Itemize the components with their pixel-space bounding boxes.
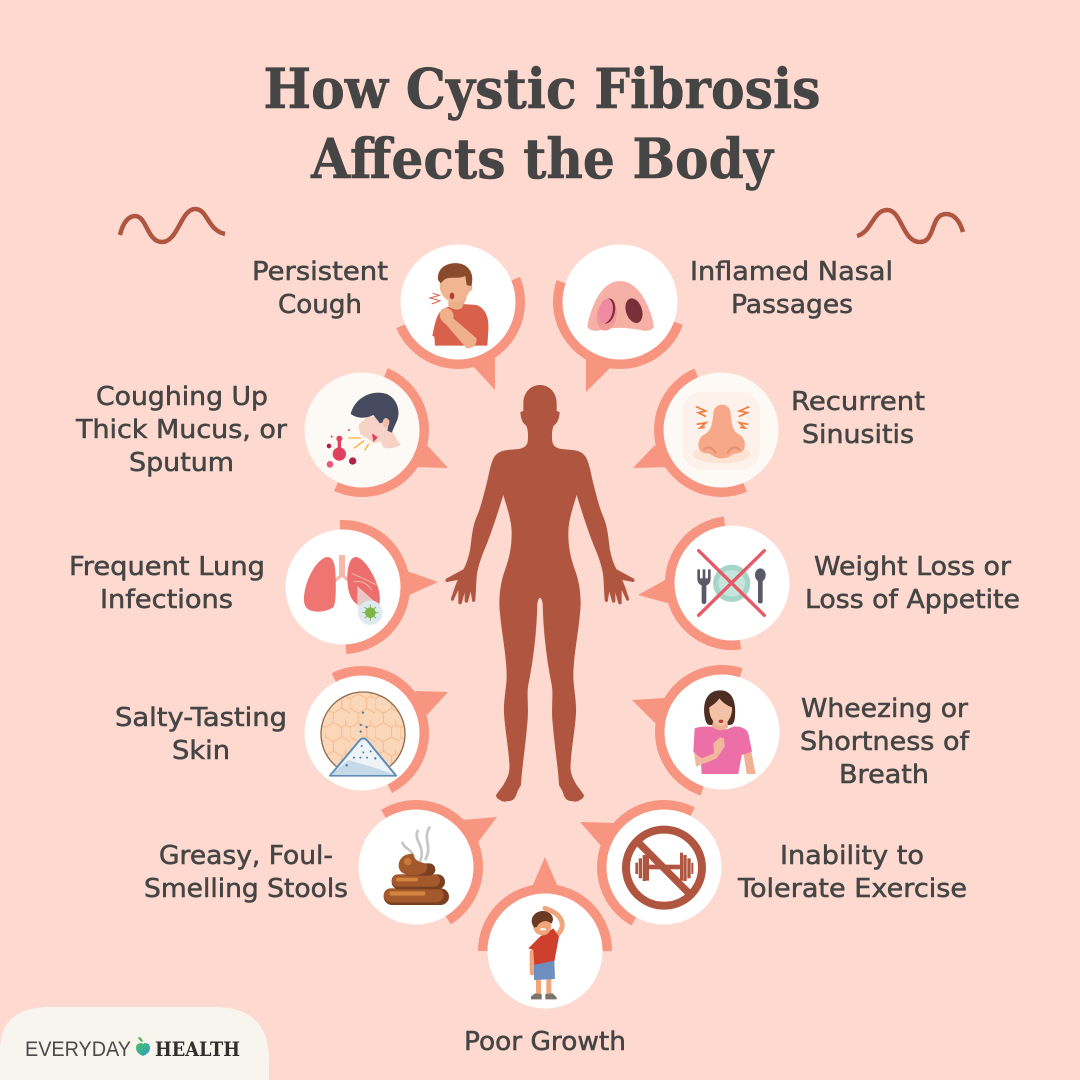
logo: everyday wordmark: EVERYDAY [25,1038,131,1061]
label: poor growth: Poor Growth [464,1027,626,1057]
panel: coughing up mucus [281,349,448,511]
label: inflamed nasal passages: Inflamed Nasal [690,257,893,287]
panel: inability to tolerate exercise [580,783,748,951]
label: inability to tolerate exercise: Inability to [780,841,924,871]
label: frequent lung infections: Infections [100,585,233,615]
label: inflamed nasal passages: Passages [731,290,853,320]
label: salty-tasting skin: Skin [172,736,230,766]
label: persistent cough: Persistent [252,257,388,287]
logo: health wordmark: HEALTH [155,1037,240,1061]
label: wheezing or shortness of breath: Breath [839,760,929,790]
icon: stool with odor [384,827,449,905]
label: wheezing or shortness of breath: Wheezing or [801,694,968,724]
logo: heart apple icon [136,1037,150,1056]
label: greasy, foul-smelling stools: Greasy, Foul- [159,841,333,871]
icon: crossed plate and cutlery [697,551,766,615]
label: recurrent sinusitis: Sinusitis [802,420,914,450]
label: greasy, foul-smelling stools: Smelling Stools [144,874,348,904]
icon: lungs with germ [304,555,383,625]
label: frequent lung infections [69,552,265,615]
label: salty-tasting skin: Salty-Tasting [115,703,287,733]
title [264,56,820,191]
label: coughing up thick mucus: Sputum [129,448,234,478]
icon: skin cells and salt pile [321,692,405,776]
panel: recurrent sinusitis [633,349,802,511]
label: inability to tolerate exercise [737,841,967,904]
left wave decoration [120,209,225,242]
label: frequent lung infections: Frequent Lung [69,552,265,582]
icon: nostrils [587,281,654,332]
label: weight loss or loss of appetite: Weight Loss or [814,552,1011,582]
label: inability to tolerate exercise: Tolerate Exercise [737,874,967,904]
icon: coughing boy [430,263,488,348]
panel: poor growth [483,857,607,1013]
right wave decoration [857,210,963,242]
title: Affects the Body [310,126,775,191]
panel: salty-tasting skin [279,650,448,816]
icon: child measuring height [528,908,562,999]
label: weight loss or loss of appetite [805,552,1020,615]
label: greasy, foul-smelling stools [144,841,348,904]
icon: woman holding chest [693,690,756,774]
label: recurrent sinusitis: Recurrent [791,387,925,417]
title: How Cystic Fibrosis [264,56,820,121]
label: persistent cough [252,257,388,320]
panel: persistent cough [377,221,539,390]
label: inflamed nasal passages [690,257,893,320]
label: coughing up thick mucus: Thick Mucus, or [75,415,287,445]
label: salty-tasting skin [115,703,287,766]
icon: coughing man with droplets [327,393,401,468]
panel: wheezing or shortness of breath [632,653,801,811]
label: wheezing or shortness of breath [800,694,970,790]
panel: weight loss or loss of appetite [638,513,802,653]
icon: no dumbbell sign [626,830,702,906]
panel: inflamed nasal passages [541,223,699,392]
logo panel [0,1007,269,1080]
body silhouette [445,385,635,802]
icon: sore nose [683,392,760,470]
label: weight loss or loss of appetite: Loss of Appetite [805,585,1020,615]
label: coughing up thick mucus: Coughing Up [96,382,268,412]
panel: greasy, foul-smelling stools [331,782,501,952]
label: coughing up thick mucus [75,382,287,478]
panel: frequent lung infections [278,522,438,652]
label: persistent cough: Cough [278,290,362,320]
label: recurrent sinusitis [791,387,925,450]
label: wheezing or shortness of breath: Shortness of [800,727,970,757]
